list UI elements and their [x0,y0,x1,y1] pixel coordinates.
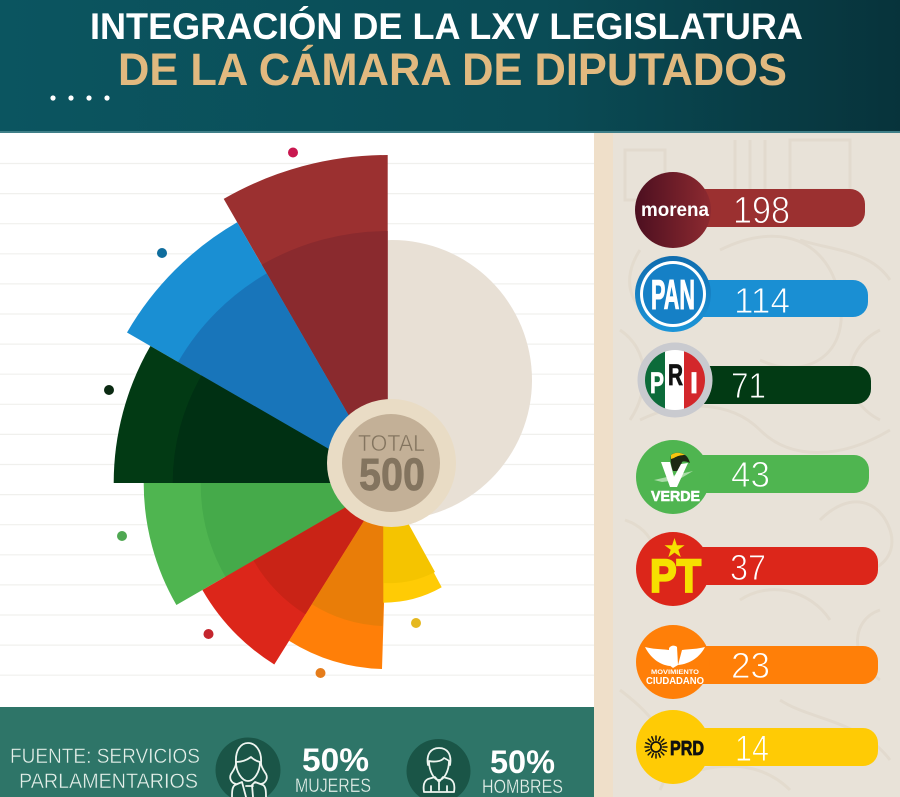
stat: women: MUJERES [295,776,371,797]
icon: PRI logo: P [650,367,664,400]
wedge: PT [202,483,388,664]
icon: PAN logo [635,256,711,332]
bar [680,728,878,766]
center total badge: 500 [359,449,425,500]
source text: PARLAMENTARIOS [19,770,198,793]
source text [10,745,200,793]
bar [680,646,878,684]
center total badge [327,399,456,527]
icon: PRI logo [638,342,712,418]
icon: PRI logo: I [690,367,698,400]
icon: PRI logo: R [668,359,683,392]
panel: header [0,0,900,133]
row: PRI 71 [638,342,871,418]
wedge: PAN [127,222,388,483]
bar [680,280,868,317]
row: Verde 43 [636,440,869,514]
center total badge: TOTAL [358,430,425,456]
value: 23 [731,645,770,686]
icon: morena logo [635,172,711,248]
icon: Verde logo [636,440,710,514]
bar [680,189,865,227]
icon: Movimiento Ciudadano logo [636,625,710,699]
title line 1: INTEGRACIÓN DE LA LXV LEGISLATURA [90,5,803,47]
icon: PRD logo [636,710,710,784]
stat: men [482,744,563,797]
source text: FUENTE: SERVICIOS [10,745,200,768]
row: Morena 198 [635,172,865,248]
wedge: Verde [144,483,388,605]
value: 71 [731,365,766,406]
stat: women: 50% [302,742,369,778]
icon: PRD logo: PRD [670,738,704,760]
stat: women [295,742,371,797]
wedge: Movimiento Ciudadano [289,483,388,669]
colored dots [104,148,421,678]
value: 198 [733,190,790,232]
icon: PAN logo: PAN [651,271,695,318]
row: PAN 114 [635,256,868,332]
panel: party sidebar background [594,133,900,797]
icon: Movimiento Ciudadano logo: MOVIMIENTO [651,669,699,676]
icon: PT logo [636,532,710,606]
wedge: total background [388,240,532,515]
bar [680,547,878,585]
stat: men: 50% [490,744,555,780]
panel: footer [0,707,594,797]
icon: man [406,739,470,797]
wedge: Morena [224,155,388,483]
decorative dots [50,95,110,101]
row: PRD 14 [636,710,878,784]
icon: woman [216,738,280,797]
bar [680,455,869,493]
row: PT 37 [636,532,878,606]
value: 43 [731,454,770,495]
bar [680,366,871,404]
chart: radial party seats [104,148,532,678]
row: Movimiento Ciudadano 23 [636,625,878,699]
icon: morena logo: morena [641,200,709,221]
icon: PT logo: PT [650,550,701,602]
wedge: PRD [383,483,442,603]
value: 114 [734,280,790,321]
icon: Movimiento Ciudadano logo: CIUDADANO [646,676,704,687]
wedge: PRI [114,346,388,483]
title line 2: DE LA CÁMARA DE DIPUTADOS [118,44,787,95]
value: 37 [730,547,766,588]
value: 14 [735,728,769,769]
icon: Verde logo: VERDE [651,488,700,505]
